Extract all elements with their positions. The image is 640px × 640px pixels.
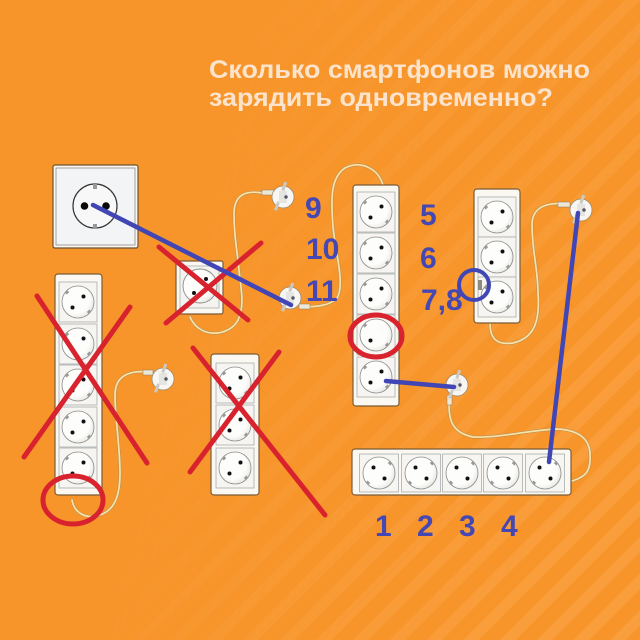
numbers 9 10 11: 10	[306, 233, 339, 266]
cable: left strip to plug	[72, 364, 174, 517]
numbers 9 10 11: 9	[305, 192, 322, 225]
red cross: left strip	[24, 296, 147, 463]
blue circle: USB port	[459, 270, 489, 300]
red cross: small socket	[159, 243, 261, 323]
numbers 1 2 3 4: 4	[501, 510, 518, 543]
numbers 1 2 3 4	[375, 510, 518, 543]
three-socket strip right	[474, 189, 520, 323]
three-socket strip centre	[211, 354, 259, 495]
red circle: left strip cable	[43, 476, 103, 524]
numbers 9 10 11	[305, 192, 339, 308]
numbers 5 6 7,8: 6	[420, 242, 437, 275]
blue line: wall socket to plug	[93, 205, 291, 305]
cable: plug to five-socket vertical strip	[279, 165, 383, 312]
cable: right strip to plug	[490, 195, 592, 343]
red cross: three-socket strip	[190, 348, 325, 515]
small single socket	[176, 261, 223, 314]
five-socket vertical strip	[353, 185, 399, 406]
numbers 9 10 11: 11	[306, 275, 338, 308]
cable: small socket to plug	[190, 182, 294, 333]
numbers 5 6 7,8: 7,8	[421, 284, 463, 317]
cable: horizontal strip to plug	[446, 370, 590, 481]
title: Сколько смартфонов можно	[209, 56, 590, 84]
numbers 1 2 3 4: 2	[417, 510, 434, 543]
five-socket horizontal strip	[352, 449, 571, 495]
title	[209, 56, 590, 112]
blue line: strip socket to plug	[386, 381, 454, 387]
five-socket strip left	[55, 274, 102, 495]
red circle: blocked socket	[350, 315, 402, 357]
blue line: horizontal strip to right plug	[549, 213, 578, 462]
numbers 1 2 3 4: 3	[459, 510, 476, 543]
numbers 5 6 7,8	[420, 199, 463, 317]
wall socket	[53, 165, 138, 248]
numbers 5 6 7,8: 5	[420, 199, 437, 232]
title: зарядить одновременно?	[209, 84, 553, 112]
numbers 1 2 3 4: 1	[375, 510, 392, 543]
